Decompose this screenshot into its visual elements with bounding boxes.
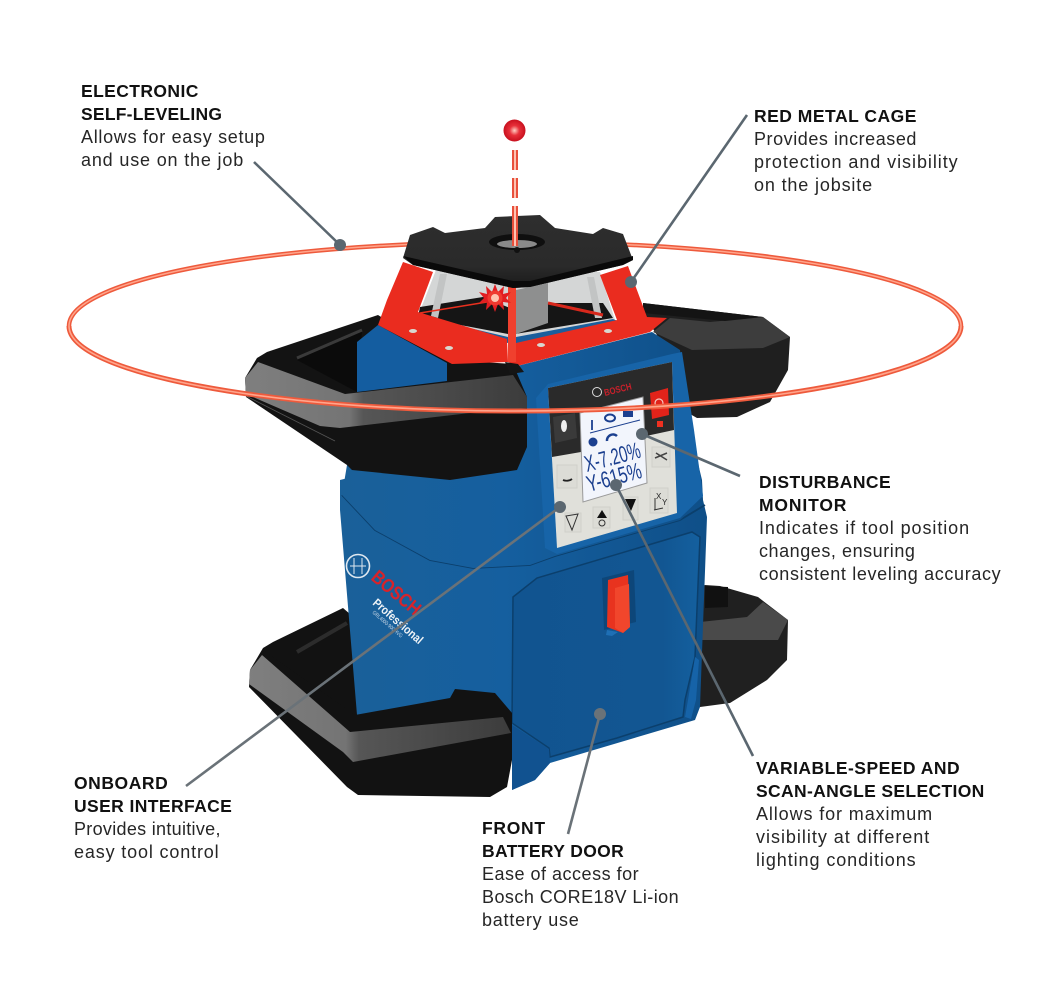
callout: front battery door: FRONT (482, 818, 546, 838)
panel buttons (557, 447, 670, 532)
plate screws (409, 329, 612, 350)
battery door (512, 532, 700, 757)
callout: red metal cage: RED METAL CAGE (754, 106, 917, 126)
power button (650, 388, 669, 419)
callout: front battery door: Ease of access for (482, 864, 639, 884)
top handle, left (245, 315, 527, 480)
leader line: variable-speed (610, 479, 753, 756)
central cylinder (516, 283, 548, 334)
display (580, 397, 647, 502)
callout: onboard user interface (74, 773, 232, 862)
rear top handle, right (643, 303, 790, 418)
callout: onboard user interface: Provides intuitive, (74, 819, 221, 839)
callout: front battery door: Bosch CORE18V Li-ion (482, 887, 679, 907)
callout: variable-speed and scan-angle selection: visibility at different (756, 827, 930, 847)
centre post (508, 286, 516, 362)
callout: variable-speed and scan-angle selection: Allows for maximum (756, 804, 933, 824)
callout: front battery door (482, 818, 679, 930)
control panel: X (656, 492, 662, 501)
thin laser lines in window (420, 302, 487, 313)
leader line: onboard user interface (186, 501, 566, 786)
leader line: electronic self-leveling (254, 162, 346, 251)
right leg and plate (508, 266, 667, 366)
laser ring: back half (69, 242, 961, 326)
callout: electronic self-leveling (81, 81, 266, 170)
base handle, front band (249, 623, 512, 797)
display readout: X-7.20% (582, 437, 643, 477)
body seam (342, 495, 705, 568)
blue shoulder left of cage (357, 325, 447, 392)
callout: electronic self-leveling: ELECTRONIC (81, 81, 199, 101)
header logo (592, 388, 602, 396)
leader line: red metal cage (625, 115, 747, 288)
callout: electronic self-leveling: and use on the job (81, 150, 244, 170)
upper body blue front (342, 332, 703, 568)
callout: disturbance monitor: consistent leveling accuracy (759, 564, 1001, 584)
callout: disturbance monitor (759, 472, 1001, 584)
laser emission star (479, 284, 511, 312)
control panel: BOSCH (603, 381, 633, 399)
callout: disturbance monitor: DISTURBANCE (759, 472, 891, 492)
leader line: front battery door (568, 708, 606, 834)
rear part of base handle, left (250, 608, 380, 720)
callout: electronic self-leveling: SELF-LEVELING (81, 104, 222, 124)
callout: variable-speed and scan-angle selection: VARIABLE-SPEED AND (756, 758, 960, 778)
logo on side: BOSCH (367, 567, 425, 620)
control panel: Y (662, 498, 668, 507)
front latch (602, 570, 636, 636)
red metal cage (378, 262, 667, 366)
blue strips (412, 316, 508, 343)
logo on side: GRL4000-90CHVG (371, 610, 403, 639)
window backdrop (418, 270, 615, 345)
display readout: Y-615% (584, 457, 644, 497)
callout: disturbance monitor: changes, ensuring (759, 541, 915, 561)
lower body (340, 440, 707, 790)
callout: onboard user interface: ONBOARD (74, 773, 168, 793)
left leg and plate (378, 262, 508, 364)
dark wedge below plate (505, 362, 524, 374)
leader line: disturbance monitor (636, 428, 740, 476)
callout: red metal cage: on the jobsite (754, 175, 873, 195)
callout: disturbance monitor: Indicates if tool position (759, 518, 970, 538)
top black cap (403, 215, 633, 288)
rear base handle, right (695, 585, 788, 707)
callout: front battery door: battery use (482, 910, 580, 930)
dark cage floor (418, 297, 613, 334)
callout: red metal cage: protection and visibility (754, 152, 959, 172)
callout: variable-speed and scan-angle selection (756, 758, 985, 870)
bluetooth button (553, 413, 577, 443)
logo on side: Professional (370, 596, 426, 647)
display readout (582, 437, 644, 497)
logo on side (346, 554, 426, 647)
callout: onboard user interface: easy tool control (74, 842, 220, 862)
glass posts (431, 274, 447, 318)
callout: red metal cage: Provides increased (754, 129, 917, 149)
callout: disturbance monitor: MONITOR (759, 495, 847, 515)
callout: front battery door: BATTERY DOOR (482, 841, 624, 861)
callout: red metal cage (754, 106, 959, 195)
callout: electronic self-leveling: Allows for easy setup (81, 127, 266, 147)
callout: onboard user interface: USER INTERFACE (74, 796, 232, 816)
control panel (548, 362, 677, 548)
laser ring: front half (69, 326, 961, 411)
callout: variable-speed and scan-angle selection: lighting conditions (756, 850, 917, 870)
callout: variable-speed and scan-angle selection: SCAN-ANGLE SELECTION (756, 781, 985, 801)
panel frame (536, 352, 703, 554)
laser beam: dashed vertical and dot (504, 120, 526, 246)
body foot corner (512, 725, 550, 790)
